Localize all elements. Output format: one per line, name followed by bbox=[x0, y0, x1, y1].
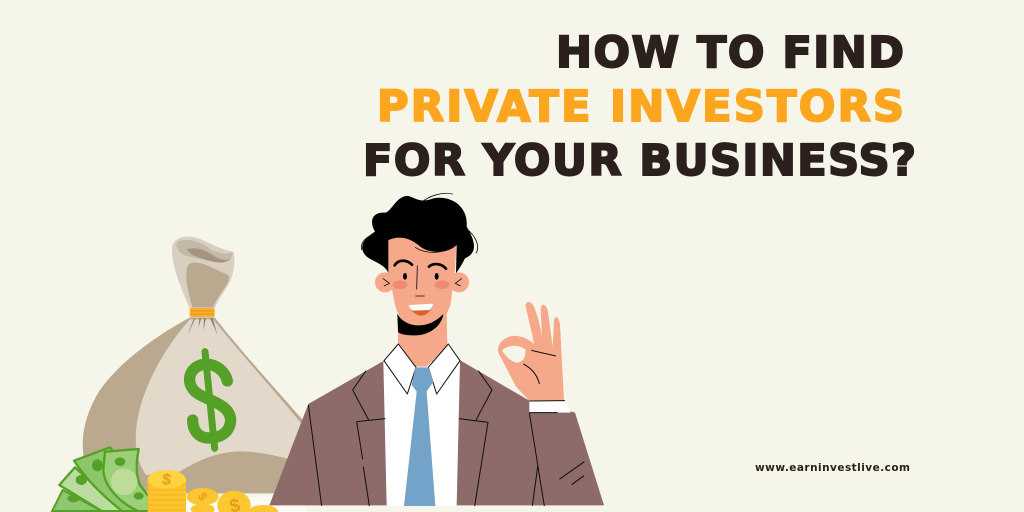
cheeks bbox=[393, 280, 407, 289]
suit bbox=[269, 361, 604, 505]
bag tie bbox=[190, 308, 215, 317]
hair outlines bbox=[361, 193, 478, 253]
title line: for your business: FOR YOUR BUSINESS? bbox=[363, 136, 916, 186]
bag neck shadow bbox=[186, 263, 229, 307]
front note bbox=[103, 449, 149, 512]
suit lines bbox=[308, 371, 584, 506]
hand lines bbox=[523, 350, 556, 384]
bag neck bbox=[172, 237, 234, 309]
bag folds bbox=[187, 318, 217, 335]
collar bbox=[384, 344, 460, 394]
beard bbox=[397, 313, 443, 335]
loose coins: $ bbox=[195, 490, 211, 503]
ears bbox=[375, 272, 395, 292]
coin stack bbox=[148, 470, 186, 512]
icon: money bag and cash bbox=[52, 237, 307, 512]
mouth bbox=[409, 304, 433, 316]
table strip bbox=[187, 496, 307, 512]
website url: www.earninvestlive.com bbox=[755, 462, 910, 474]
shirt bbox=[383, 362, 460, 506]
title bbox=[363, 28, 916, 186]
hand bbox=[498, 302, 564, 401]
loose coins bbox=[187, 488, 278, 512]
dollar sign bbox=[205, 352, 215, 448]
face bbox=[387, 237, 457, 329]
title line: private investors: PRIVATE INVESTORS bbox=[377, 82, 904, 132]
cash stack bbox=[52, 447, 149, 512]
upper note bbox=[74, 447, 147, 512]
ok gesture gap bbox=[502, 346, 525, 363]
bag opening bbox=[177, 240, 233, 263]
neck bbox=[398, 310, 447, 367]
fingers and palm bbox=[498, 302, 564, 401]
mid note bbox=[59, 467, 123, 512]
hair bbox=[362, 196, 474, 273]
eyes and brows bbox=[395, 261, 446, 269]
back note bbox=[52, 490, 103, 512]
title line: how to find: HOW TO FIND bbox=[556, 28, 904, 78]
nose bbox=[415, 265, 425, 296]
illustration: businessman bbox=[269, 193, 604, 506]
shirt cuff bbox=[529, 401, 571, 413]
bag body bbox=[83, 317, 303, 493]
tie bbox=[404, 367, 435, 506]
bag front panel bbox=[136, 319, 302, 475]
coin stack: $ bbox=[161, 471, 172, 489]
